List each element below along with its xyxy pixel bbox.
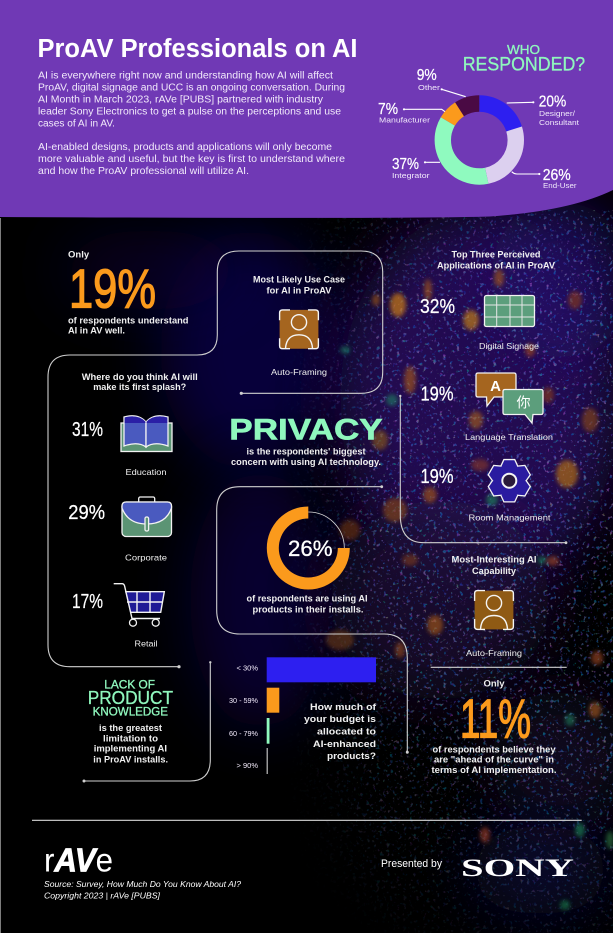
panel: top three perceived applications: Language Translation <box>465 432 553 442</box>
panel: top three perceived applications: 19% <box>420 384 454 406</box>
callout: privacy: concern with using AI technology. <box>231 457 381 468</box>
donut labels and leader lines: 26% <box>543 167 571 184</box>
panel: top three perceived applications: Room Management <box>468 513 551 523</box>
source note: Source: Survey, How Much Do You Know About AI? <box>44 879 241 889</box>
panel: 26 percent using AI products: products in their installs. <box>252 605 364 616</box>
icon: gear <box>488 460 531 501</box>
panel: most likely use case: for AI in ProAV <box>266 285 332 296</box>
panel: most-interesting AI capability: Auto-Framing <box>466 648 522 658</box>
panel: 26 percent using AI products: 26% <box>288 536 332 561</box>
donut labels and leader lines: 37% <box>392 156 419 173</box>
icon: book <box>121 416 172 452</box>
text block: budget question: How much of <box>310 702 377 713</box>
callout: privacy: PRIVACY <box>229 413 383 446</box>
bar chart: budget allocated to AI: < 30% <box>237 664 258 673</box>
heading: who responded <box>463 43 585 76</box>
intro text block <box>38 70 345 177</box>
panel: where AI will make its first splash <box>68 372 198 649</box>
donut labels and leader lines: End-User <box>543 181 577 190</box>
panel: where AI will make its first splash: 31% <box>72 419 103 441</box>
icon: language translation bubbles <box>476 373 543 423</box>
icon: digital signage <box>484 296 534 326</box>
stat: 11 percent ahead of the curve <box>432 679 556 776</box>
callout: lack of product knowledge: is the greatest <box>99 723 163 734</box>
callout: lack of product knowledge: implementing AI <box>94 744 167 755</box>
panel: most-interesting AI capability: Capability <box>472 566 517 577</box>
panel: where AI will make its first splash: Where do you think AI will <box>82 372 198 383</box>
intro text block: cases of AI in AV. <box>38 118 115 129</box>
background: black nebula <box>0 190 613 933</box>
stat: 19 percent understand AI: AI in AV well. <box>68 326 125 337</box>
donut labels and leader lines <box>378 67 580 190</box>
panel: most-interesting AI capability: Most-Interesting AI <box>452 555 536 566</box>
connector line: installs panel <box>217 485 409 754</box>
callout: lack of product knowledge: PRODUCT <box>88 687 173 708</box>
icon: shopping cart <box>114 584 164 626</box>
donut labels and leader lines: 9% <box>417 67 437 84</box>
title: ProAV Professionals on AI <box>38 35 358 63</box>
panel: top three perceived applications: Top Three Perceived <box>452 250 541 261</box>
panel: most likely use case <box>253 275 345 377</box>
text block: budget question: AI-enhanced <box>313 739 376 750</box>
stat: 19 percent understand AI: of respondents understand <box>68 316 189 327</box>
donut labels and leader lines: Designer/ <box>539 109 576 118</box>
panel: 26 percent using AI products <box>246 506 368 616</box>
panel: top three perceived applications: Digital Signage <box>479 341 539 351</box>
donut labels and leader lines: 7% <box>378 101 398 118</box>
panel: where AI will make its first splash: 17% <box>72 591 103 613</box>
donut labels and leader lines: Integrator <box>392 171 430 180</box>
bar chart: budget allocated to AI: 60 - 79% <box>229 729 258 738</box>
connector line: top-left panel to bottom of left column <box>48 251 383 668</box>
panel: where AI will make its first splash: Corporate <box>125 553 167 563</box>
panel: where AI will make its first splash: 29% <box>68 502 105 524</box>
panel: top three perceived applications: 19% <box>420 466 454 488</box>
text block: budget question: your budget is <box>304 714 376 725</box>
bar chart: budget allocated to AI: 30 - 59% <box>229 696 258 705</box>
logo: rAVe: rAVe <box>44 842 113 878</box>
presented by label: Presented by <box>381 858 442 870</box>
intro text block: ProAV, digital signage and UCC is an ongoing conversation. During <box>38 82 345 93</box>
stat: 11 percent ahead of the curve: of respondents believe they <box>432 745 556 756</box>
heading: who responded: RESPONDED? <box>463 55 585 76</box>
icon: language translation bubbles: 你 <box>516 392 530 412</box>
intro text block: AI-enabled designs, products and applications will only become <box>38 142 332 153</box>
stat: 11 percent ahead of the curve: 11% <box>460 688 531 750</box>
callout: lack of product knowledge: in ProAV installs. <box>93 755 168 766</box>
logo: Sony: SONY <box>461 855 574 882</box>
text block: budget question <box>304 702 377 762</box>
bar chart: budget allocated to AI: > 90% <box>237 761 258 770</box>
divider: under auto-framing <box>431 666 567 668</box>
icon: auto-framing person <box>475 591 513 629</box>
stat: 11 percent ahead of the curve: terms of AI implementation. <box>432 765 556 776</box>
stat: 11 percent ahead of the curve: Only <box>483 679 505 690</box>
icon: briefcase <box>122 497 172 536</box>
panel: where AI will make its first splash: make its first splash? <box>93 382 186 393</box>
connector line: budget chart to lack of knowledge <box>82 661 212 782</box>
panel: top three perceived applications: Applications of AI in ProAV <box>437 260 556 271</box>
heading: who responded: WHO <box>507 43 540 57</box>
donut labels and leader lines: Other <box>418 83 441 92</box>
header panel: purple band <box>0 0 613 218</box>
icon: auto-framing person <box>280 310 318 349</box>
intro text block: more valuable and useful, but the key is first to understand where <box>38 154 345 165</box>
panel: most-interesting AI capability <box>452 555 536 658</box>
callout: lack of product knowledge: KNOWLEDGE <box>93 707 168 719</box>
text block: budget question: allocated to <box>317 727 376 738</box>
panel: top three perceived applications <box>420 250 556 523</box>
stat: 19 percent understand AI: Only <box>68 249 90 260</box>
intro text block: AI Month in March 2023, rAVe [PUBS] partnered with industry <box>38 94 323 105</box>
stat: 19 percent understand AI: 19% <box>69 258 156 320</box>
panel: where AI will make its first splash: Education <box>126 467 167 477</box>
footer divider <box>32 819 582 821</box>
donut chart: respondents <box>443 104 516 176</box>
intro text block: leader Sony Electronics to get a pulse on the perceptions and use <box>38 106 341 117</box>
panel: where AI will make its first splash: Retail <box>134 639 158 649</box>
donut labels and leader lines: Consultant <box>539 118 580 127</box>
callout: privacy: is the respondents' biggest <box>246 446 366 457</box>
callout: lack of product knowledge: LACK OF <box>104 680 155 692</box>
donut gauge: 26 percent <box>267 506 350 590</box>
callout: lack of product knowledge <box>88 680 173 766</box>
icon: language translation bubbles: A <box>490 378 501 395</box>
donut labels and leader lines: Manufacturer <box>379 116 431 125</box>
text block: budget question: products? <box>327 751 376 762</box>
panel: top three perceived applications: 32% <box>420 296 455 318</box>
stat: 19 percent understand AI <box>68 249 189 337</box>
panel: most likely use case: Most Likely Use Case <box>253 275 345 286</box>
intro text block: AI is everywhere right now and understanding how AI will affect <box>38 70 333 81</box>
source note: Copyright 2023 | rAVe [PUBS] <box>44 891 161 901</box>
callout: lack of product knowledge: limitation to <box>103 734 158 745</box>
bar chart: budget allocated to AI <box>229 657 376 774</box>
panel: 26 percent using AI products: of respondents are using AI <box>246 594 368 605</box>
donut labels and leader lines: 20% <box>539 94 566 111</box>
stat: 11 percent ahead of the curve: are "ahead of the curve" in <box>434 755 554 766</box>
callout: privacy <box>229 413 383 468</box>
connector line: privacy to most interesting <box>399 395 567 544</box>
intro text block: and how the ProAV professional will utilize AI. <box>38 166 249 177</box>
source note <box>44 879 241 901</box>
panel: most likely use case: Auto-Framing <box>271 367 327 377</box>
